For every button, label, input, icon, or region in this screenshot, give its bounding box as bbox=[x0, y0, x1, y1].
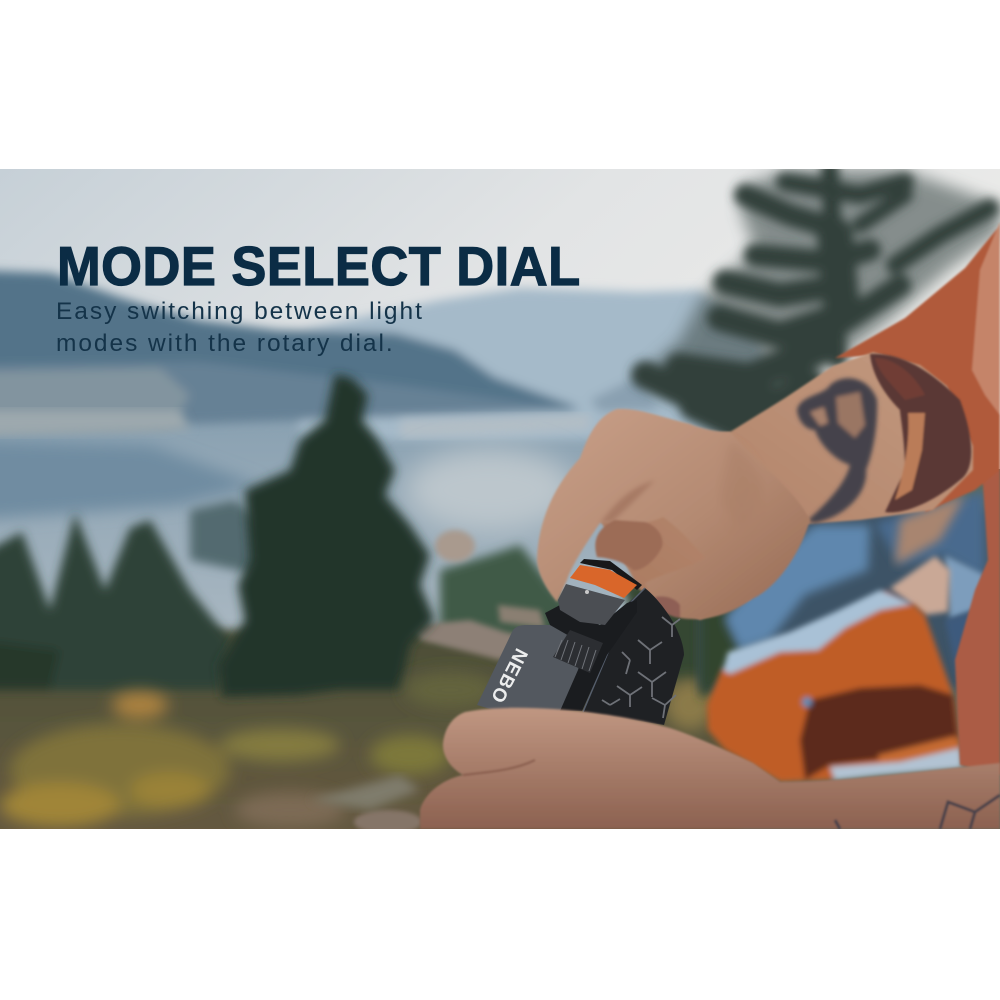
orange dial ring bbox=[570, 565, 637, 598]
title: MODE SELECT DIAL bbox=[57, 235, 581, 297]
headlamp bbox=[477, 559, 684, 725]
subtitle text bbox=[56, 298, 424, 356]
subtitle text: Easy switching between light bbox=[56, 298, 424, 325]
rock in foreground bbox=[352, 808, 420, 829]
right shirt cloth bbox=[835, 222, 1000, 775]
lower hand bbox=[420, 708, 1000, 829]
rocks and distant buildings bbox=[415, 530, 545, 660]
foreground shrubs bbox=[0, 672, 715, 828]
upper hand bbox=[537, 409, 810, 619]
right pine bbox=[640, 169, 1000, 435]
photo scene bbox=[0, 169, 1000, 829]
tattoo: sleeve piece bbox=[870, 354, 971, 513]
curled middle finger bbox=[595, 520, 663, 570]
dial top bbox=[580, 559, 642, 590]
forearm bbox=[600, 352, 973, 620]
background person bbox=[700, 490, 990, 700]
thumb nail bbox=[655, 596, 680, 618]
sky bbox=[0, 169, 1000, 469]
backdrop bbox=[734, 469, 1000, 829]
background trees bbox=[0, 500, 745, 690]
brand mark: NEBO bbox=[486, 645, 531, 707]
centre pine bbox=[218, 374, 435, 697]
clip bbox=[545, 600, 637, 711]
dial barrel bbox=[558, 584, 625, 625]
ground bbox=[0, 630, 740, 850]
ribbed knob bbox=[553, 630, 603, 673]
subtitle text: modes with the rotary dial. bbox=[56, 330, 395, 356]
tattoo: butterfly bbox=[797, 378, 877, 523]
pine branches bbox=[645, 169, 990, 425]
strap bbox=[583, 588, 684, 725]
distant mountains bbox=[0, 270, 780, 440]
backpack bbox=[707, 590, 962, 782]
body bbox=[477, 625, 578, 710]
lake bbox=[0, 414, 636, 636]
lake shading bbox=[0, 440, 260, 520]
pine canopy haze bbox=[646, 169, 1000, 387]
